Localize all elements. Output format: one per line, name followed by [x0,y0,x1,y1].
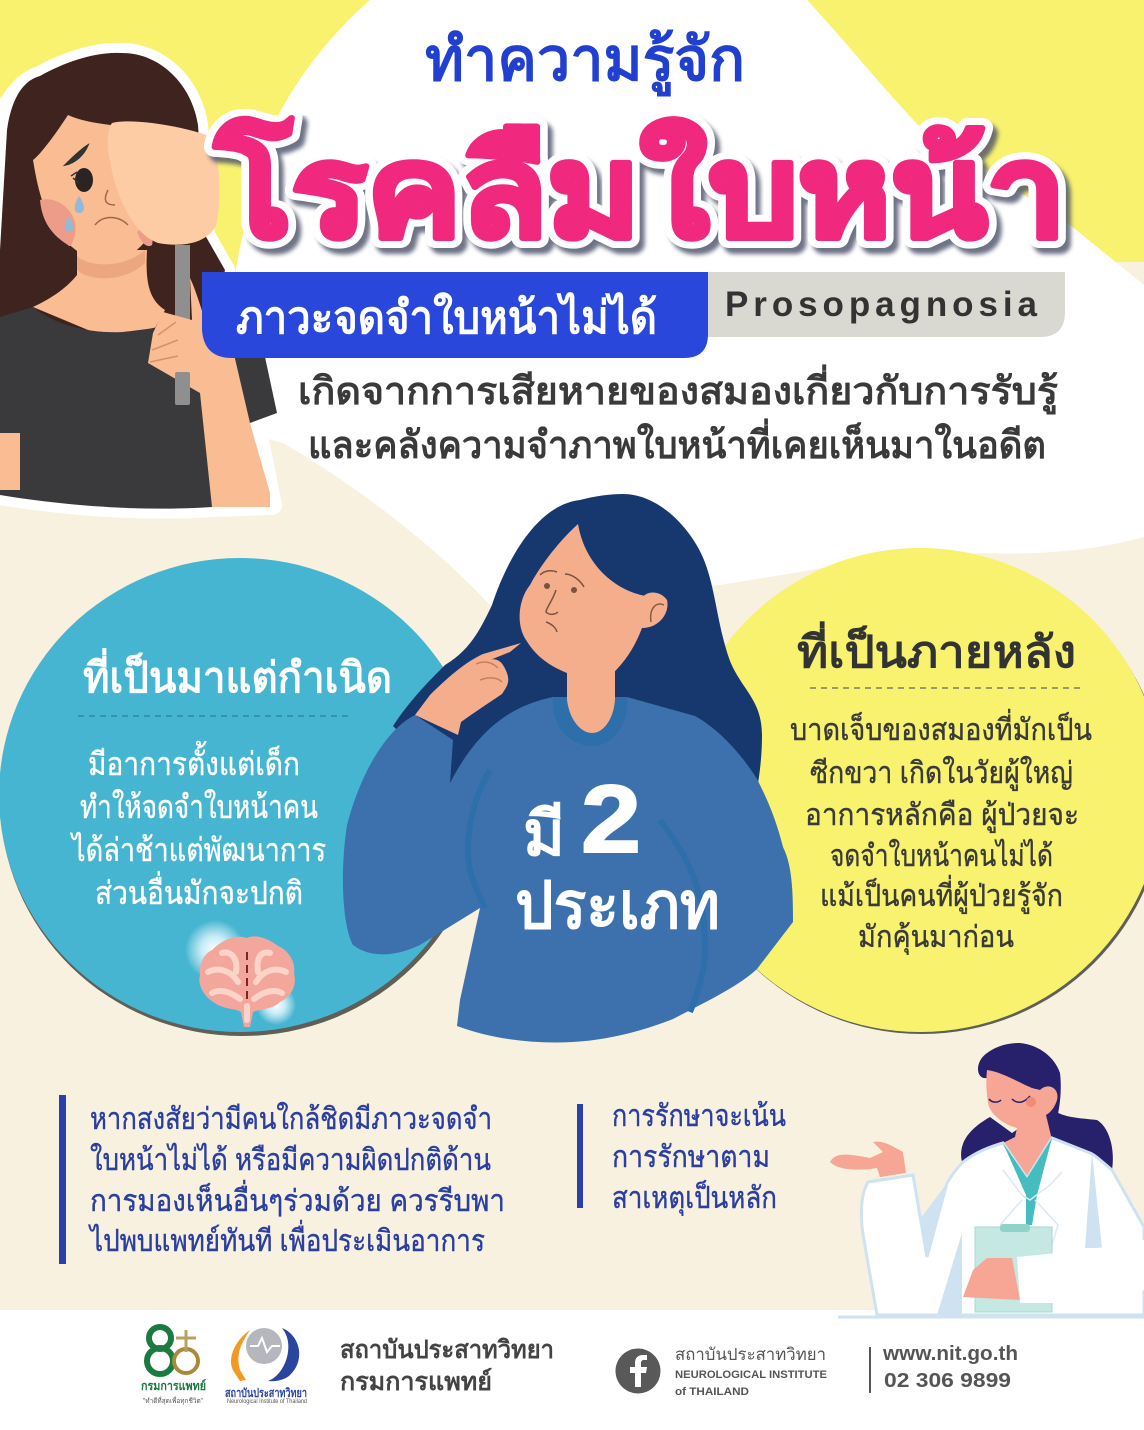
text: facebook page name: สถาบันประสาทวิทยา [675,1345,826,1364]
text: acquired description: บาดเจ็บของสมองที่มักเป็น [790,709,1092,747]
callout: treatment: สาเหตุเป็นหลัก [612,1179,777,1217]
text: facebook page name [675,1345,827,1398]
text: acquired description: มักคุ้นมาก่อน [858,921,1014,956]
text: acquired description: แม้เป็นคนที่ผู้ป่วยรู้จัก [820,875,1063,914]
text: there are 2 types: ประเภท [515,868,720,942]
panel: congenital type circle [0,558,484,1036]
text: there are 2 types [515,766,720,942]
text: website and phone: www.nit.go.th [882,1343,1018,1365]
text: organisation name: กรมการแพทย์ [340,1367,492,1396]
callout: treatment [577,1100,786,1217]
subtitle button: inability to recognise faces [202,272,708,358]
text: organisation name [340,1336,554,1396]
logo: neurological institute: สถาบันประสาทวิทยา [225,1386,307,1400]
text: congenital description [69,741,326,911]
subtitle tab: Prosopagnosia: Prosopagnosia [725,285,1038,324]
text: there are 2 types: 2 [581,766,641,873]
callout: treatment: การรักษาตาม [612,1141,770,1174]
main title: face blindness: โรคลืมใบหน้า [214,117,1066,264]
callout: treatment: การรักษาจะเน้น [612,1100,786,1133]
logo: neurological institute: Neurological Institute of Thailand [227,1399,307,1405]
main title: face blindness: โรคลืมใบหน้า [219,123,1071,270]
text: website and phone: 02 306 9899 [884,1370,1011,1392]
heading: congenital: ที่เป็นมาแต่กำเนิด [83,648,392,701]
callout: see a doctor advice: หากสงสัยว่ามีคนใกล้ชิดมีภาวะจดจำ [90,1102,492,1136]
text: website and phone [882,1343,1018,1392]
text: acquired description: อาการหลักคือ ผู้ป่วยจะ [805,799,1079,833]
logo: department of medical services 80 years: กรมการแพทย์ [141,1379,206,1393]
heading: acquired: ที่เป็นภายหลัง [797,621,1076,677]
icon: facebook [616,1348,660,1394]
text: organisation name: สถาบันประสาทวิทยา [340,1336,554,1364]
callout: see a doctor advice [59,1095,505,1264]
panel: acquired type circle [677,548,1144,1034]
text: facebook page name: NEUROLOGICAL INSTITUTE [675,1369,827,1381]
text: congenital description: มีอาการตั้งแต่เด็ก [88,741,300,782]
text: cause description: และคลังความจำภาพใบหน้าที่เคยเห็นมาในอดีต [308,418,1046,467]
subtitle button: inability to recognise faces: ภาวะจดจำใบหน้าไม่ได้ [236,291,657,343]
logo: neurological institute [225,1328,307,1405]
footer [141,1327,1018,1405]
illustration: doctor [830,1043,1144,1317]
main title: face blindness: โรคลืมใบหน้า [214,117,1066,264]
callout: see a doctor advice: การมองเห็นอื่นๆร่วมด้วย ควรรีบพา [90,1180,505,1218]
subtitle tab: Prosopagnosia [690,272,1065,337]
text: there are 2 types: มี [523,800,565,869]
text: acquired description: ซีกขวา เกิดในวัยผู้ใหญ่ [810,756,1073,791]
illustration: thinking woman [343,494,793,1042]
text: cause description [298,364,1059,467]
text: cause description: เกิดจากการเสียหายของสมองเกี่ยวกับการรับรู้ [298,364,1059,415]
logo: department of medical services 80 years [141,1327,206,1405]
text: acquired description [790,709,1092,956]
text: congenital description: ส่วนอื่นมักจะปกติ [95,871,303,911]
logo: department of medical services 80 years: "ทำดีที่สุดเพื่อทุกชีวิต" [143,1396,203,1405]
text: congenital description: ได้ล่าช้าแต่พัฒนาการ [69,832,326,868]
text: congenital description: ทำให้จดจำใบหน้าคน [80,789,318,825]
text: acquired description: จดจำใบหน้าคนไม่ได้ [830,838,1053,873]
callout: see a doctor advice: ใบหน้าไม่ได้ หรือมีความผิดปกติด้าน [90,1142,491,1177]
callout: see a doctor advice: ไปพบแพทย์ทันที เพื่อประเมินอาการ [88,1220,485,1258]
text: facebook page name: of THAILAND [675,1386,749,1398]
illustration: girl holding blank face paddle [0,53,277,509]
title line: get to know: ทำความรู้จัก [425,26,745,97]
icon: brain [185,920,296,1027]
